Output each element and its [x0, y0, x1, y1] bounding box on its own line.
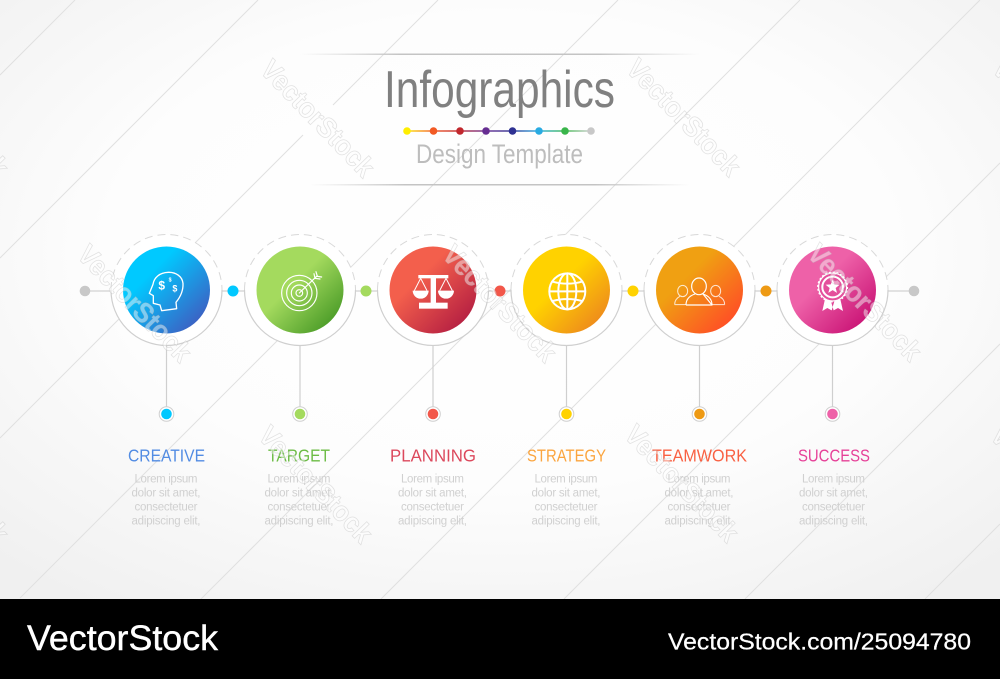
body text: Lorem ipsum	[401, 474, 464, 486]
body text	[664, 474, 734, 528]
watermarks: VectorStock	[252, 420, 379, 549]
icon: team	[675, 278, 725, 305]
watermarks: VectorStock	[801, 238, 928, 367]
watermarks	[0, 53, 1000, 549]
body text: Lorem ipsum	[534, 474, 598, 486]
icon: award badge	[818, 272, 847, 311]
body text	[132, 474, 200, 528]
title: Infographics	[384, 61, 615, 119]
body text	[799, 474, 868, 528]
body text: consectetuer	[668, 502, 731, 514]
body text: dolor sit amet,	[264, 488, 334, 500]
step 1: creative	[111, 234, 222, 528]
body text: adipiscing elit,	[132, 516, 200, 528]
title panel	[300, 54, 700, 186]
step 6: success	[777, 234, 888, 528]
label: target: TARGET	[268, 446, 330, 466]
watermarks: VectorStock	[618, 419, 745, 548]
step 2: target	[244, 234, 356, 528]
icon: head with dollars: $	[172, 283, 177, 293]
body text: consectetuer	[401, 502, 464, 514]
body text: consectetuer	[534, 502, 598, 514]
body text: consectetuer	[802, 502, 865, 514]
body text: dolor sit amet,	[532, 488, 600, 500]
body text: adipiscing elit,	[264, 516, 334, 528]
body text	[264, 474, 334, 528]
body text: Lorem ipsum	[268, 474, 330, 486]
label: creative: CREATIVE	[128, 446, 205, 466]
icon: head with dollars	[149, 272, 183, 311]
label: planning: PLANNING	[390, 446, 476, 466]
body text: Lorem ipsum	[668, 474, 730, 486]
icon: scales	[413, 275, 454, 309]
body text: dolor sit amet,	[799, 488, 868, 500]
timeline connectors and end dots	[80, 286, 919, 296]
label: teamwork: TEAMWORK	[652, 446, 747, 466]
colour dot rule	[403, 127, 595, 135]
body text: adipiscing elit,	[398, 516, 467, 528]
icon: target with arrow	[282, 272, 322, 311]
watermarks: VectorStock	[71, 239, 198, 368]
step 5: teamwork	[644, 234, 755, 528]
body text	[532, 474, 600, 528]
body text	[398, 474, 467, 528]
step 3: planning	[378, 234, 488, 528]
label: success: SUCCESS	[798, 446, 870, 466]
body text: adipiscing elit,	[664, 516, 734, 528]
icon: globe	[549, 273, 585, 309]
body text: consectetuer	[268, 502, 331, 514]
footer url: VectorStock.com/25094780	[668, 628, 971, 654]
body text: consectetuer	[134, 502, 198, 514]
body text: adipiscing elit,	[532, 516, 600, 528]
label: strategy: STRATEGY	[527, 446, 606, 466]
body text: dolor sit amet,	[398, 488, 467, 500]
watermarks: VectorStock	[436, 239, 563, 368]
body text: Lorem ipsum	[802, 474, 865, 486]
body text: adipiscing elit,	[799, 516, 868, 528]
subtitle: Design Template	[416, 139, 583, 169]
body text: dolor sit amet,	[664, 488, 734, 500]
watermarks: VectorStock	[254, 54, 381, 183]
footer bar	[0, 599, 1000, 679]
icon: head with dollars: $	[169, 278, 172, 284]
body text: dolor sit amet,	[132, 488, 200, 500]
watermarks: VectorStock	[620, 53, 747, 182]
step 4: strategy	[511, 234, 622, 528]
icon: head with dollars: $	[158, 279, 165, 293]
footer brand: VectorStock	[27, 619, 219, 658]
body text: Lorem ipsum	[134, 474, 198, 486]
